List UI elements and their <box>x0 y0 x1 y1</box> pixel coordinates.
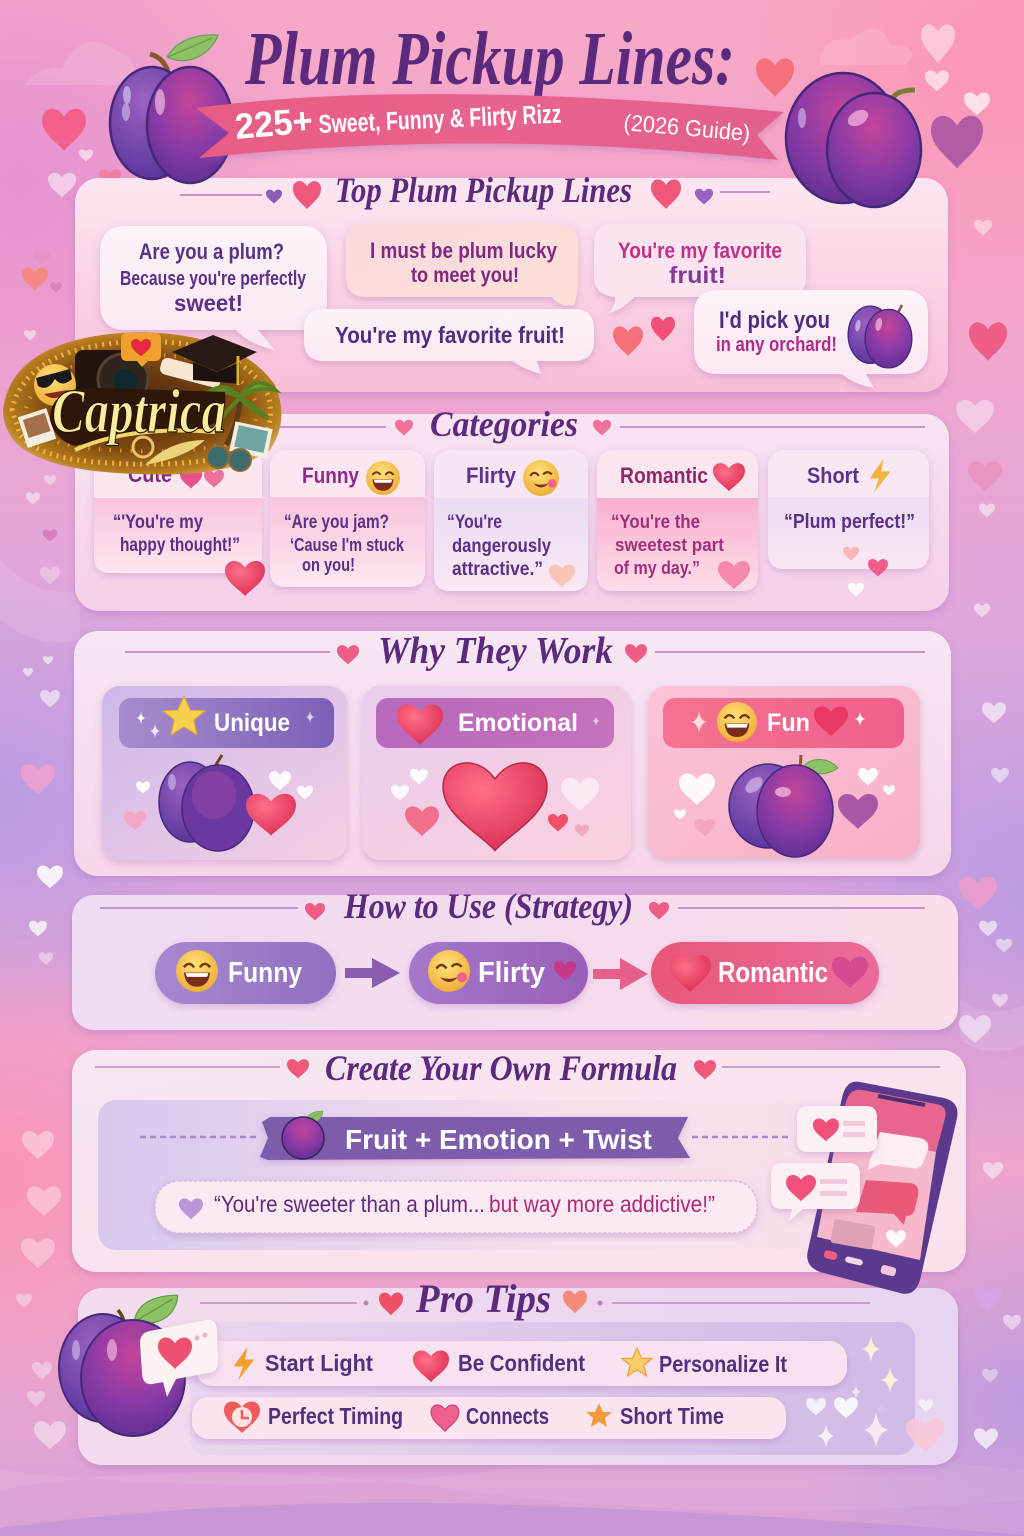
card: fun <box>648 686 920 858</box>
speech bubble: are you a plum <box>100 226 327 350</box>
banner text <box>233 98 751 147</box>
logo: graduation cap <box>172 335 257 385</box>
formula quote: “You're sweeter than a plum... <box>214 1191 485 1217</box>
strategy pill: funny <box>155 942 336 1004</box>
heading: how to use: How to Use (Strategy) <box>343 886 633 926</box>
category card: flirty: Flirty <box>466 463 517 488</box>
category card: funny: ‘Cause I'm stuck <box>290 535 405 555</box>
panel: how to use <box>72 895 958 1030</box>
icon: left plum <box>110 35 233 183</box>
icon: plum with leaf <box>674 755 895 857</box>
speech bubble: favorite fruit: fruit! <box>669 262 726 288</box>
logo: diploma <box>159 357 223 389</box>
panel: categories <box>75 414 949 611</box>
category card: romantic: of my day.” <box>614 558 700 578</box>
heading: top plum pickup lines <box>180 170 770 210</box>
heading: top plum pickup lines: Top Plum Pickup Lines <box>335 170 632 210</box>
sparkles and hearts <box>806 1336 944 1452</box>
title: Plum Pickup Lines: <box>244 17 735 101</box>
banner ribbon <box>196 94 784 160</box>
speech bubble: plum lucky: to meet you! <box>411 264 519 287</box>
strategy pill: romantic <box>651 942 879 1004</box>
speech bubble: plum lucky <box>346 223 578 306</box>
banner text: 225+ <box>233 99 314 147</box>
speech bubble: favorite fruit wide <box>304 309 594 374</box>
logo: heart bubble <box>121 333 161 367</box>
heading: why they work <box>125 630 925 672</box>
speech bubble: favorite fruit <box>594 224 806 314</box>
category card: cute: “'You're my <box>113 512 203 533</box>
speech bubble <box>140 1320 218 1397</box>
category card: short: “Plum perfect!” <box>784 511 915 533</box>
tips row 1: Be Confident <box>458 1350 585 1376</box>
category card: romantic: Romantic <box>620 463 708 488</box>
heading: categories: Categories <box>430 404 578 444</box>
category card: flirty: attractive.” <box>452 559 543 580</box>
heading: create your own formula: Create Your Own Formula <box>325 1048 677 1088</box>
category card: funny <box>270 450 425 587</box>
icon: heart on cute card <box>225 561 265 596</box>
tips row 1: Start Light <box>265 1350 373 1376</box>
panel: pro tips <box>78 1288 958 1465</box>
tips row 2: Perfect Timing <box>268 1403 403 1429</box>
banner text: (2026 Guide) <box>623 109 751 146</box>
speech bubble: pick you in any orchard: I'd pick you <box>719 307 830 334</box>
icon: plum with heart <box>124 755 313 851</box>
speech bubble: pick you in any orchard: in any orchard! <box>716 334 837 356</box>
chat bubble with heart lower <box>771 1163 860 1221</box>
category card: flirty: “You're <box>447 512 502 533</box>
pro tips inner panel <box>190 1322 915 1455</box>
hearts between bubbles <box>613 317 675 356</box>
category card: flirty <box>434 450 588 591</box>
panel: create your own formula <box>72 1050 966 1272</box>
panel: top plum pickup lines <box>75 178 948 392</box>
logo: feather and swoosh <box>75 430 251 471</box>
speech bubble: are you a plum: sweet! <box>174 290 243 316</box>
icon: plum with speech bubble <box>59 1295 218 1436</box>
logo: camera <box>75 350 148 404</box>
speech bubble: are you a plum: Because you're perfectly <box>120 268 307 290</box>
tips row 1: Personalize It <box>659 1351 787 1377</box>
logo: palm tree <box>205 383 275 445</box>
speech bubble: are you a plum: Are you a plum? <box>139 239 284 264</box>
card: fun: Fun <box>767 709 810 737</box>
speech bubble: favorite fruit wide: You're my favorite fruit! <box>335 322 565 348</box>
logo: captrica <box>3 332 281 474</box>
category card: short: Short <box>807 463 860 488</box>
arrow: funny to flirty <box>345 958 400 988</box>
tips row 2: Short Time <box>620 1403 724 1429</box>
category card: funny: “Are you jam? <box>284 512 389 533</box>
formula banner <box>140 1111 792 1160</box>
panel: why they work <box>74 631 951 876</box>
heading: categories <box>280 404 925 444</box>
strategy pill: romantic: Romantic <box>718 957 828 989</box>
tips row 2 <box>192 1397 786 1439</box>
strategy pill: funny: Funny <box>228 957 302 989</box>
logo: photos <box>18 408 273 459</box>
tips row 2: Connects <box>466 1403 549 1429</box>
heading: why they work: Why They Work <box>378 630 613 672</box>
category card: flirty: dangerously <box>452 536 551 557</box>
category card: romantic <box>597 450 758 591</box>
category card: funny: on you! <box>302 555 355 575</box>
category card: romantic: sweetest part <box>615 535 724 555</box>
formula quote <box>155 1181 757 1233</box>
icon: big heart <box>391 763 599 850</box>
speech bubble: pick you in any orchard <box>694 290 928 388</box>
tips row 1 <box>195 1341 847 1386</box>
speech bubble: favorite fruit: You're my favorite <box>618 238 782 263</box>
icon: right plum <box>786 73 921 207</box>
formula banner: Fruit + Emotion + Twist <box>345 1124 652 1155</box>
logo: wordmark: Captrica <box>52 378 226 446</box>
formula inner panel <box>98 1100 878 1250</box>
decorative background clouds <box>25 29 912 85</box>
logo: smiley with sunglasses <box>34 364 76 406</box>
phone illustration <box>771 1082 957 1294</box>
logo: wordmark backing swash <box>50 388 225 446</box>
banner text: Sweet, Funny & Flirty Rizz <box>318 98 562 139</box>
category card: romantic: “You're the <box>611 512 700 533</box>
category card: cute: Cute <box>128 462 172 487</box>
category card: funny: Funny <box>302 463 360 488</box>
category card: cute <box>94 448 262 573</box>
card: emotional <box>362 686 631 860</box>
category card: cute: happy thought!” <box>120 535 240 556</box>
card: unique: Unique <box>214 709 290 737</box>
formula quote: but way more addictive!” <box>489 1191 715 1217</box>
heading: pro tips <box>200 1276 870 1321</box>
card: unique <box>102 686 347 860</box>
chat bubble with heart <box>797 1106 877 1152</box>
speech bubble: plum lucky: I must be plum lucky <box>370 238 558 263</box>
heading: create your own formula <box>95 1048 940 1088</box>
strategy pill: flirty: Flirty <box>478 957 545 989</box>
heading: how to use <box>100 886 925 926</box>
category card: short <box>768 450 929 597</box>
card: emotional: Emotional <box>458 709 578 737</box>
arrow: flirty to romantic <box>593 958 648 990</box>
strategy pill: flirty <box>409 942 588 1004</box>
heading: pro tips: Pro Tips <box>415 1276 551 1321</box>
